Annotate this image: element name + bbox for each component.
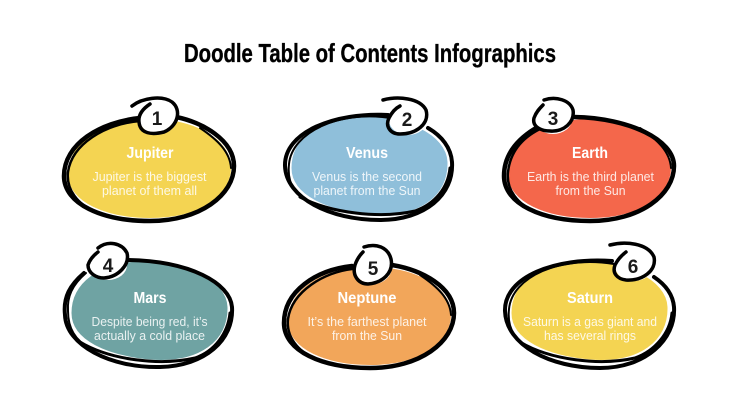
number badge 4: 4 — [103, 256, 114, 277]
description: Venus is the second — [312, 169, 422, 184]
description: Jupiter is the biggest — [92, 169, 207, 184]
title: Doodle Table of Contents Infographics — [184, 38, 556, 68]
description: planet of them all — [102, 183, 197, 198]
heading: Mars — [134, 290, 167, 307]
number badge 1 — [132, 98, 178, 134]
number badge 5: 5 — [368, 259, 379, 280]
description: planet from the Sun — [314, 183, 420, 198]
description: has several rings — [544, 328, 636, 343]
number badge 2: 2 — [402, 110, 412, 131]
description — [92, 314, 208, 343]
number badge 1: 1 — [152, 109, 163, 130]
description: from the Sun — [556, 183, 626, 198]
panel: Earth — [504, 98, 674, 221]
number badge 3 — [534, 98, 573, 134]
heading: Earth — [572, 145, 608, 162]
panel: Jupiter — [64, 98, 234, 221]
description: Despite being red, it’s — [92, 314, 208, 329]
description: from the Sun — [332, 328, 402, 343]
heading: Jupiter — [126, 145, 174, 162]
description: Earth is the third planet — [527, 169, 654, 184]
panel: Neptune — [284, 246, 454, 368]
number badge 4 — [88, 243, 127, 280]
description — [92, 169, 207, 198]
number badge 2 — [383, 98, 427, 135]
heading: Saturn — [567, 290, 613, 307]
panel: Mars — [65, 243, 232, 367]
number badge 5 — [354, 246, 392, 284]
description: actually a cold place — [94, 328, 205, 343]
number badge 6 — [610, 243, 654, 281]
description — [308, 314, 427, 343]
panel: Saturn — [505, 243, 674, 368]
description — [527, 169, 654, 198]
heading: Neptune — [338, 290, 397, 307]
number badge 3: 3 — [548, 109, 558, 130]
panel: Venus — [285, 98, 452, 220]
description: Saturn is a gas giant and — [523, 314, 657, 329]
description: It’s the farthest planet — [308, 314, 427, 329]
description — [523, 314, 657, 343]
heading: Venus — [346, 145, 388, 162]
description — [312, 169, 422, 198]
number badge 6: 6 — [628, 257, 638, 278]
